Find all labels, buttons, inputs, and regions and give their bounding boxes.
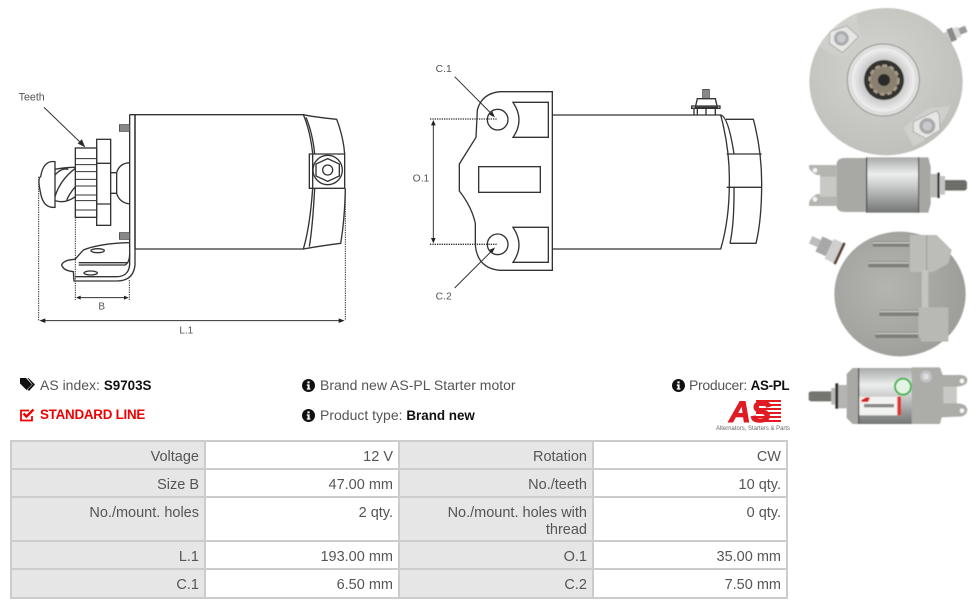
- row: C.1 and C.2: C.2: [564, 577, 587, 593]
- icon: info: [302, 379, 315, 392]
- AS index: AS index: S9703S: [40, 377, 151, 393]
- row: C.1 and C.2: C.1: [176, 577, 199, 593]
- specification table: [10, 440, 788, 599]
- technical drawing: side view with dimensions: [18, 92, 346, 337]
- row: mounting holes: No./mount. holes with thread: [448, 505, 587, 538]
- row: C.1 and C.2: [12, 570, 786, 597]
- icon: checked box: [20, 408, 34, 422]
- mounting flange: [459, 92, 552, 270]
- dimension: L.1: L.1: [179, 326, 194, 337]
- row: L.1 and O.1: O.1: [564, 549, 587, 565]
- logo: AS-PL: [716, 398, 791, 432]
- icon: info: [672, 379, 685, 392]
- row: C.1 and C.2: 6.50 mm: [337, 577, 393, 593]
- label: Teeth: Teeth: [19, 92, 45, 104]
- row: voltage and rotation: CW: [757, 449, 781, 465]
- photo: starter motor front end: [809, 8, 970, 155]
- icon: tags: [20, 378, 35, 391]
- dimension: O.1: [413, 119, 497, 244]
- icon: info: [302, 409, 315, 422]
- row: size B and teeth: 10 qty.: [739, 477, 781, 493]
- dimension: B: B: [98, 302, 105, 313]
- motor body: [130, 115, 345, 249]
- terminal bolt: [692, 89, 720, 115]
- pinion gear and shaft: [39, 139, 130, 225]
- photo: starter motor rear end: [806, 229, 966, 356]
- dimension: B: [75, 217, 129, 313]
- row: voltage and rotation: [12, 442, 786, 468]
- row: voltage and rotation: Voltage: [151, 449, 199, 465]
- motor body: [552, 115, 762, 249]
- row: mounting holes: 2 qty.: [359, 505, 393, 521]
- photo: starter motor side view, gear to the left: [809, 367, 967, 424]
- mounting bracket: [62, 115, 135, 281]
- product type: Product type: Brand new: [320, 407, 475, 423]
- row: C.1 and C.2: 7.50 mm: [725, 577, 781, 593]
- row: size B and teeth: 47.00 mm: [329, 477, 393, 493]
- label and arrow: C.2: C.2: [436, 291, 452, 302]
- row: L.1 and O.1: L.1: [179, 549, 199, 565]
- row: mounting holes: 0 qty.: [747, 505, 781, 521]
- label and arrow: C.1: [436, 64, 495, 117]
- producer: Producer: AS-PL: [689, 377, 789, 393]
- row: L.1 and O.1: 193.00 mm: [320, 549, 393, 565]
- label and arrow: C.1: C.1: [436, 64, 452, 75]
- arrow: teeth pointer: [44, 107, 84, 146]
- product description: Brand new AS-PL Starter motor: [320, 377, 516, 393]
- dimension: O.1: O.1: [413, 174, 430, 185]
- row: L.1 and O.1: 35.00 mm: [717, 549, 781, 565]
- product photos column: [808, 8, 968, 425]
- dimension: L.1: [39, 177, 345, 337]
- row: L.1 and O.1: [12, 542, 786, 568]
- row: size B and teeth: No./teeth: [528, 477, 587, 493]
- row: voltage and rotation: Rotation: [533, 449, 587, 465]
- label and arrow: C.2: [436, 247, 495, 302]
- technical drawing: front view with dimensions: [413, 64, 762, 302]
- photo: starter motor side view, gear to the right: [809, 157, 967, 213]
- row: size B and teeth: [12, 470, 786, 496]
- standard line badge: STANDARD LINE: [40, 407, 145, 422]
- row: mounting holes: [12, 498, 786, 540]
- row: voltage and rotation: 12 V: [363, 449, 393, 465]
- row: size B and teeth: Size B: [157, 477, 199, 493]
- row: mounting holes: No./mount. holes: [89, 505, 199, 521]
